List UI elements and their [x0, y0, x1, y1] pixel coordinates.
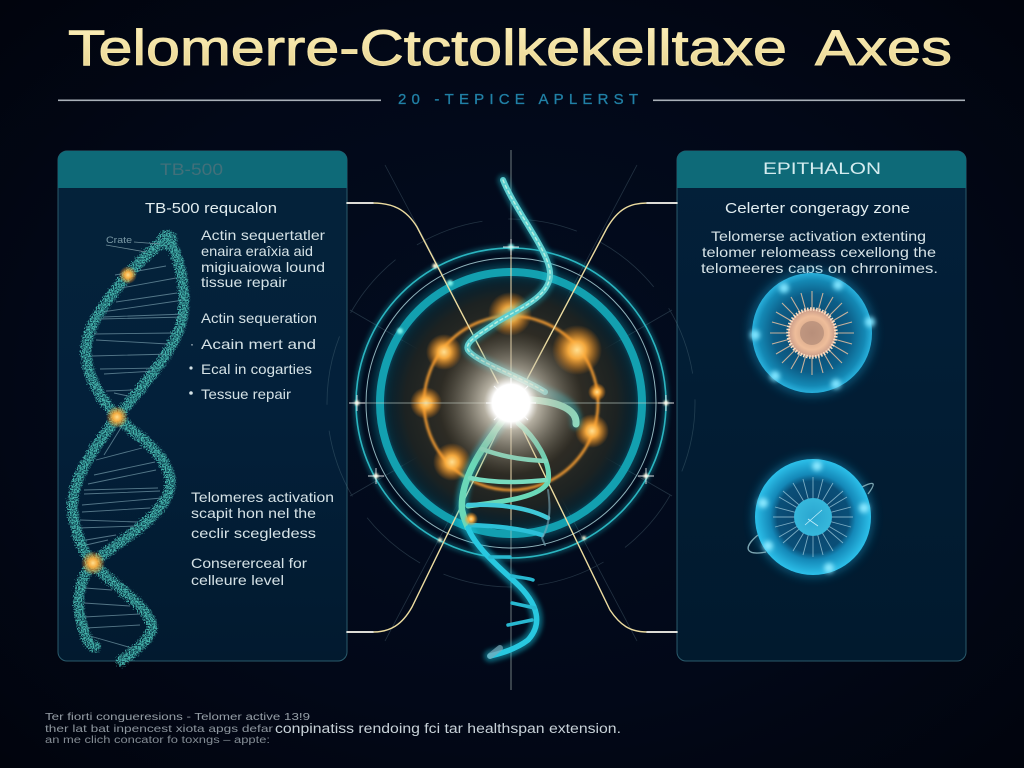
faint radial guide lines: [327, 165, 695, 641]
helix rungs: [468, 449, 548, 625]
text block: EPITHALON heading: Celerter congeragy zone: [725, 201, 910, 217]
upper helix strand: [467, 180, 576, 424]
subtitle with rules: 20 -TEPICE APLERST: [398, 91, 638, 108]
footer text: [45, 712, 621, 746]
text block: actin description: tissue repair: [201, 274, 287, 290]
text block: actin bullet list: [189, 310, 317, 402]
central starburst: [439, 331, 583, 475]
text block: TB-500 heading: TB-500 requcalon: [145, 201, 277, 217]
panel: EPITHALON: [677, 151, 966, 661]
icon: sphere with orange nucleus: [749, 270, 875, 396]
icon: left DNA helix: [73, 230, 186, 661]
text block: telomeres activation: [191, 489, 334, 588]
text block: actin bullet list: Acain mert and: [201, 336, 316, 352]
orange ring with glowing nodes: [410, 292, 609, 490]
text block: actin bullet list: Tessue repair: [201, 386, 291, 402]
footer text: conpinatiss rendoing fci tar healthspan extension.: [275, 721, 621, 736]
text block: actin description: migiuaiowa lound: [201, 259, 325, 275]
cross lines: [352, 150, 672, 690]
text block: actin description: Actin sequertatler: [201, 227, 325, 243]
callout label: Crane: Crate: [106, 235, 132, 246]
panel header: EPITHALON: EPITHALON: [763, 159, 881, 178]
central DNA helix: [462, 180, 576, 656]
footer text: ther lat bat inpencest xiota apgs defar: [45, 723, 274, 735]
text block: telomeres activation: celleure level: [191, 572, 284, 588]
text block: actin description: enaira eraîxia aid: [201, 243, 313, 259]
gold nodes on DNA: [81, 266, 137, 575]
connector curves: [347, 203, 677, 632]
panel header: TB-500: TB-500: [160, 160, 223, 179]
title: [68, 20, 952, 76]
title: Axes: [815, 20, 952, 76]
text block: telomeres activation: Consererceal for: [191, 555, 307, 571]
text block: telomeres activation: ceclir scegledess: [191, 525, 316, 541]
text block: telomerase description: telomer relomeass cexellong the: [702, 244, 936, 260]
rings: [356, 248, 666, 558]
text block: telomerase description: [701, 228, 938, 276]
text block: telomeres activation: scapit hon nel the: [191, 505, 316, 521]
lower helix strand: [462, 420, 549, 656]
title: Telomerre-Ctctolkekelltaxe: [68, 20, 787, 76]
text block: actin bullet list: Actin sequeration: [201, 310, 317, 326]
panel header: EPITHALON: [677, 151, 966, 188]
text block: actin bullet list: ·: [190, 337, 194, 351]
callout label: Crane: [106, 235, 160, 252]
text block: telomerase description: telomeeres caps on chrronimes.: [701, 260, 938, 276]
footer text: an me clich concator fo toxngs – appte:: [45, 735, 270, 746]
central diagram: [327, 150, 695, 690]
footer text: Ter fiorti congueresions - Telomer active 13!9: [45, 712, 311, 723]
text block: actin bullet list: Ecal in cogarties: [201, 361, 312, 377]
icon: blue sphere with ring: [748, 457, 873, 577]
sparkles on rings: [349, 239, 674, 542]
text block: telomeres activation: Telomeres activation: [191, 489, 334, 505]
panel header: TB-500: [58, 151, 347, 188]
text block: telomerase description: Telomerse activation extenting: [711, 228, 926, 244]
panel: TB-500: [58, 151, 347, 661]
helix strands: [73, 230, 184, 661]
text block: actin description: [201, 227, 325, 290]
